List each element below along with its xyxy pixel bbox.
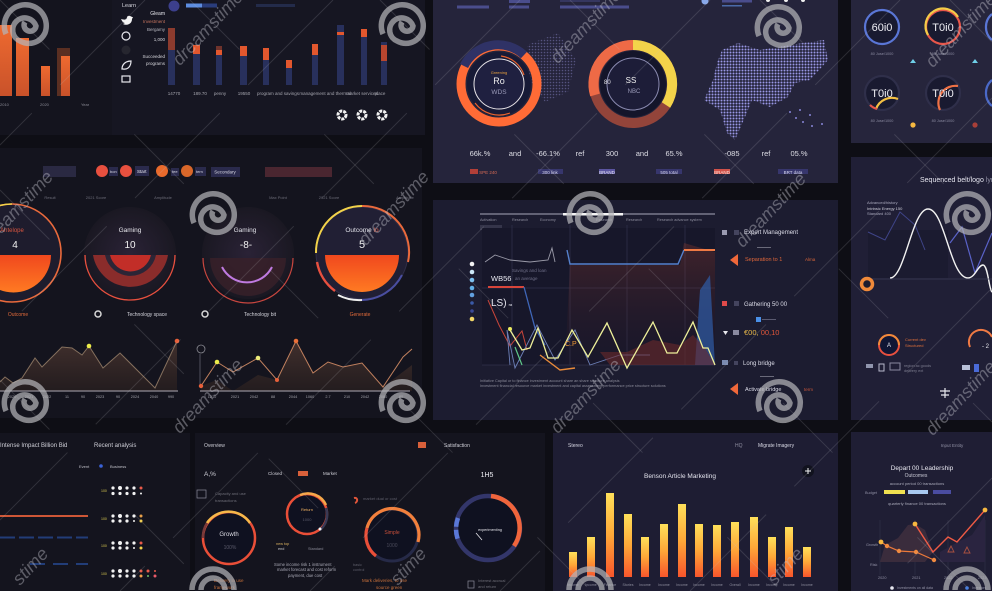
chart tabs <box>480 213 715 230</box>
header pills <box>43 165 332 177</box>
panel headings: Satisfaction <box>444 443 470 449</box>
bar axis labels: Income <box>693 583 705 587</box>
area chart right: 2042 <box>361 395 369 399</box>
chart footnote: Investment financial resource market investment and capital assessment performance price structure solutions <box>480 384 666 388</box>
panel: bottom middle rings <box>195 433 545 591</box>
line chart: 2021 <box>912 576 920 580</box>
bar axis labels: Income <box>567 583 579 587</box>
ring chart 1: transactions <box>215 498 237 503</box>
small icons row <box>866 363 979 373</box>
gauge captions: Generate <box>350 312 371 318</box>
bar axis labels: Income <box>748 583 760 587</box>
stats row <box>470 149 808 158</box>
donut chart right <box>593 45 672 123</box>
stacked bar chart: 14770 <box>168 91 181 96</box>
chart area: Savings and loan <box>512 268 547 273</box>
ring chart 4: Interest accrual <box>478 578 505 583</box>
area chart right: 88 <box>271 395 275 399</box>
orange bar chart: 2010 <box>0 102 10 107</box>
chart area <box>482 225 715 370</box>
small gauge captions: Result <box>44 195 57 200</box>
panel labels: Stereo <box>568 443 583 449</box>
social icon list <box>121 3 136 82</box>
stacked bar chart: penny <box>214 91 227 96</box>
watermark: dreamstime text: stime <box>386 544 430 589</box>
stacked chart legend: 1,000 <box>154 37 165 42</box>
area chart right: 2042 <box>250 395 258 399</box>
area chart right: 1210 <box>208 395 216 399</box>
panel heading: account period 00 transactions <box>890 481 944 486</box>
dot matrix: 100 <box>101 544 107 548</box>
panel headings: 1H5 <box>481 472 494 479</box>
small gauge captions: Max Point <box>269 195 288 200</box>
gauge 4: 5 <box>359 239 365 251</box>
curve legend: Advanced/history <box>867 200 898 205</box>
dot matrix: 100 <box>101 517 107 521</box>
gauge captions: Technology bit <box>244 312 277 318</box>
stats tags: SPE 240 <box>479 170 497 175</box>
panel labels <box>568 443 795 449</box>
chart tabs: Research <box>596 218 612 222</box>
gauge captions: 80 Juse/1000 <box>871 119 893 123</box>
orange bar chart <box>0 25 90 107</box>
donut chart left <box>461 45 537 122</box>
header pills: bon <box>110 169 117 174</box>
ring chart 1 <box>197 490 255 590</box>
social icon list: Learn <box>122 3 136 9</box>
area chart left <box>0 339 179 399</box>
ring chart 2: market forecast and cost reform <box>277 567 337 572</box>
mini gauge row: A <box>887 343 891 349</box>
chart title: Benson Article Marketing <box>644 473 716 480</box>
area chart right: 1060 <box>306 395 314 399</box>
area chart left: 2020 <box>8 395 16 399</box>
bell curve chart <box>862 209 992 292</box>
gauge 2 <box>84 207 176 300</box>
chart legend: Investors <box>972 586 986 590</box>
stacked bar chart: place <box>375 91 386 96</box>
titles <box>0 443 136 449</box>
gauge rings <box>865 9 992 110</box>
stacked chart legend <box>142 11 166 66</box>
panel headings: Overview <box>204 443 225 449</box>
header pills: Start <box>137 169 147 174</box>
donut chart right: NBC <box>628 89 641 95</box>
stats row: 300 <box>606 149 618 158</box>
area chart left: 11 <box>65 395 69 399</box>
stats row: and <box>636 149 648 158</box>
gauge 1: 4 <box>12 240 18 251</box>
gauge values: 60i0 <box>872 22 892 34</box>
header tabs <box>457 0 805 8</box>
gauge values: T0i0 <box>932 88 954 100</box>
bar axis labels: Income <box>676 583 688 587</box>
ring chart 1: framework <box>214 585 236 590</box>
side notes: Gathering 50 00 <box>744 302 788 308</box>
watermark: dreamstime text: stime <box>763 544 807 589</box>
side notes: €00, 00,10 <box>744 328 779 337</box>
area chart right <box>197 339 412 399</box>
gauge captions: 80 Juse/1000 <box>932 52 954 56</box>
header pills: tern <box>196 169 203 174</box>
panel: top right gauges <box>851 0 992 143</box>
panel: middle right curves <box>851 157 992 420</box>
stats row: ref <box>762 149 771 158</box>
mini gauge row: Current dev <box>905 337 926 342</box>
orange bar chart: Year <box>81 102 90 107</box>
bar axis labels: Overall <box>729 583 741 587</box>
stats tags: 505 total <box>660 170 678 175</box>
stats tags <box>470 169 808 175</box>
bar axis labels: Finance <box>604 583 616 587</box>
colour legend <box>865 490 951 495</box>
dotted world map <box>704 40 828 140</box>
gauge values: T0i0 <box>871 88 893 100</box>
small gauge captions: Amplitude <box>396 195 415 200</box>
plus button <box>802 465 814 477</box>
gauge captions: 80 Juse/1000 <box>932 119 954 123</box>
bar axis labels: Income <box>585 583 597 587</box>
ring chart 4: experimenting <box>478 528 502 532</box>
gauge 3 <box>202 207 294 303</box>
stacked chart legend: Investment <box>143 19 166 24</box>
panel: bottom left matrix <box>0 433 190 591</box>
gauge 4 <box>316 206 409 300</box>
panel: top center donuts and map <box>433 0 838 183</box>
area chart right: 2080 <box>379 395 387 399</box>
small gauge captions <box>44 195 415 200</box>
stats tags: BRT data <box>784 170 803 175</box>
stats row: -085 <box>724 149 740 158</box>
side notes: term <box>804 387 813 392</box>
stats tags: BRAND <box>599 170 616 175</box>
chart header <box>168 0 295 12</box>
ring chart 2: Some income risk 1 instrument <box>274 562 332 567</box>
ring chart 1: Delivery in use <box>214 578 244 583</box>
gauge 2: 10 <box>124 240 136 251</box>
donut chart left: Ro <box>493 76 505 86</box>
area chart left: 2022 <box>43 395 51 399</box>
ring chart 1: Growth <box>219 532 239 538</box>
ring chart 3: basic <box>353 563 362 567</box>
gauge 3: -8- <box>240 240 252 251</box>
vertical bar chart <box>569 493 811 577</box>
panel heading <box>888 443 964 506</box>
gauge values <box>871 22 954 100</box>
bar axis labels: Income <box>711 583 723 587</box>
mini gauge row <box>879 330 992 355</box>
small gauge captions: 2021 Score <box>86 195 107 200</box>
legend dots <box>470 262 474 321</box>
panel headings: Market <box>323 471 338 476</box>
ring chart 2: 1000 <box>303 517 312 522</box>
line chart: 2020 <box>878 576 886 580</box>
dot matrix: 100 <box>101 572 107 576</box>
status markers <box>910 59 978 128</box>
panel labels: Migrate Imagery <box>758 443 795 449</box>
area chart left: 990 <box>168 395 174 399</box>
ring chart 2 <box>274 493 337 578</box>
stacked bar chart: 19550 <box>238 91 251 96</box>
area chart right: 2021 <box>231 395 239 399</box>
chart area: C.P <box>565 341 577 348</box>
mini gauge row: - 2 <box>982 344 990 350</box>
line chart <box>866 508 987 580</box>
chart legend: Investments on all data <box>897 586 933 590</box>
gauge values: T0i0 <box>932 22 954 34</box>
ring chart 3: 1000 <box>386 543 398 549</box>
small gauge captions: 2021 Score <box>319 195 340 200</box>
area chart right: 2044 <box>289 395 297 399</box>
stats row: and <box>509 149 521 158</box>
ring chart 3: Mark deliveries, to use <box>362 578 408 583</box>
stacked chart legend: Bergamy <box>147 27 166 32</box>
panel heading: Outcomes <box>905 473 928 479</box>
area chart left: 90 <box>81 395 85 399</box>
gauge 3: Gaming <box>234 227 257 234</box>
line chart: Risk <box>870 563 877 567</box>
line chart: 2023 <box>978 576 986 580</box>
panel: bottom center bar chart <box>553 433 838 591</box>
orange bar chart: 2020 <box>40 102 50 107</box>
stats tags: 300 link <box>542 170 559 175</box>
stacked bar chart <box>168 25 387 96</box>
dot mesh <box>527 33 576 102</box>
ring chart 3 <box>353 496 419 590</box>
side notes: Separation to 1 <box>745 257 782 263</box>
orange trend line <box>0 516 88 564</box>
chart footnote: Initiative Capital or to finance investment account share an share structure analysis <box>480 379 620 383</box>
ring chart 2: Return <box>301 507 313 512</box>
chart area: an average <box>515 276 538 281</box>
panel: middle center line chart <box>433 200 838 420</box>
stats tags: BRAND <box>714 170 731 175</box>
watermark: dreamstime text: stime <box>8 544 52 589</box>
legend <box>79 464 126 469</box>
panel heading: Depart 00 Leadership <box>891 465 954 472</box>
bar axis labels: Income <box>639 583 651 587</box>
icon: cross marker <box>940 388 950 398</box>
panel heading: quarterly finance 00 transactions <box>888 501 946 506</box>
gauge captions: Technology space <box>127 312 167 318</box>
ring chart 2: Standard <box>308 547 323 551</box>
donut chart right: 80 <box>604 80 611 86</box>
ring chart 2: payment, due cost <box>288 573 323 578</box>
bar axis labels: Stories <box>623 583 634 587</box>
header pills: fee <box>172 169 178 174</box>
watermark: dreamstime text: dreamstime <box>546 355 625 437</box>
ring chart 3: source green <box>376 585 403 590</box>
chart tabs: Activation <box>480 218 496 222</box>
donut chart right: SS <box>626 76 636 85</box>
bar axis labels: Income <box>766 583 778 587</box>
stats row: 05.% <box>790 149 808 158</box>
stacked chart legend: programs <box>146 61 166 66</box>
area chart right: 80 <box>399 395 403 399</box>
ring chart 3: Simple <box>384 530 400 536</box>
header pills: Secondary <box>214 170 237 174</box>
ring chart 3: control <box>353 568 365 572</box>
icon: three gears <box>338 111 386 119</box>
watermark: dreamstime text: dreamstime <box>354 167 433 249</box>
stats row: 65.% <box>665 149 683 158</box>
dot matrix: 100 <box>101 489 107 493</box>
stats row: ref <box>576 149 585 158</box>
donut chart left: Greening <box>491 70 507 75</box>
gauge captions <box>871 52 954 123</box>
chart tabs: Research <box>626 218 642 222</box>
panel: middle left gauges <box>0 148 422 418</box>
bar axis labels: Income <box>783 583 795 587</box>
bar axis labels: Income <box>801 583 813 587</box>
panel: bottom right line chart <box>851 432 992 591</box>
legend: Business <box>110 464 126 469</box>
legend: Event <box>79 464 90 469</box>
stats row: -66.1% <box>536 149 560 158</box>
dot matrix <box>101 486 156 578</box>
curve legend: Standard 400 <box>867 211 892 216</box>
stacked bar chart: market services <box>346 91 378 96</box>
side notes: Long bridge <box>743 361 775 367</box>
chart area: WB56 <box>491 274 511 283</box>
panel: top stacked bars <box>112 0 425 135</box>
ring chart 3: market dual or cost <box>363 496 398 501</box>
ring chart 2: end <box>278 547 284 551</box>
stacked chart legend: Gleam <box>150 11 165 17</box>
panel headings <box>204 442 494 479</box>
gauge 1 <box>0 204 61 302</box>
area chart left: 2040 <box>150 395 158 399</box>
line chart: 2022 <box>944 576 952 580</box>
area chart left: 90 <box>116 395 120 399</box>
side notes: Alma <box>805 257 816 262</box>
chart tabs: Economy <box>540 218 556 222</box>
curve legend <box>867 200 903 216</box>
side notes: Activate bridge <box>745 387 781 393</box>
panel headings: A,% <box>204 471 216 478</box>
stats row: 66k.% <box>470 149 491 158</box>
chart legend <box>890 586 986 590</box>
area chart left: 2021 <box>25 395 33 399</box>
stacked chart legend: Succeeded <box>142 54 165 59</box>
small icons row: delivery ext <box>904 369 924 373</box>
ring chart 1: Capacity and use <box>215 491 247 496</box>
ring chart 2: new top <box>276 542 289 546</box>
ring chart 4 <box>456 496 520 589</box>
curve legend: Intrinsic Energy 150 <box>867 206 903 211</box>
stacked bar chart: program and savings <box>257 91 300 96</box>
gauge 2: Gaming <box>119 227 142 234</box>
ring chart 4: and return <box>478 584 496 589</box>
chart area: LS) ra <box>491 298 513 309</box>
donut chart left: WDS <box>491 89 507 96</box>
mini gauge row: Structured <box>905 343 923 348</box>
titles: Recent analysis <box>94 443 136 449</box>
panel: top left bars <box>0 0 112 135</box>
chart tabs: Research advance system <box>657 218 702 222</box>
chart tabs: Research <box>512 218 528 222</box>
stacked bar chart: 189.70 <box>193 91 207 96</box>
bar axis labels <box>567 583 813 587</box>
area chart left: 2023 <box>96 395 104 399</box>
gauge captions: Outcome <box>8 312 28 318</box>
area chart left: 2024 <box>131 395 139 399</box>
chart footnote <box>480 379 666 388</box>
titles: Intense Impact Billion Bid <box>0 443 67 449</box>
stacked bar chart: management and thermal <box>299 91 351 96</box>
watermark: dreamstime text: dreamstime <box>731 169 810 251</box>
line chart: Growth <box>866 543 878 547</box>
gauge captions: 80 Juse/1000 <box>871 52 893 56</box>
bar axis labels: Income <box>658 583 670 587</box>
colour legend: Budget <box>865 491 878 495</box>
panel heading: Input Entity <box>941 443 964 448</box>
small icons row: region ac goods <box>904 364 931 368</box>
watermark: dreamstime text: dreamstime <box>168 355 247 437</box>
ring chart 1: 100% <box>224 545 237 551</box>
side notes: Expert Management <box>744 230 798 236</box>
small gauge captions: Amplitude <box>154 195 173 200</box>
gauge 1: Antelope <box>0 228 25 234</box>
panel headings: Closed <box>268 471 283 476</box>
area chart right: 210 <box>344 395 350 399</box>
panel labels: HQ <box>735 443 743 449</box>
gauge 4: Outcome lo <box>345 227 379 234</box>
area chart right: 2.7 <box>325 395 331 399</box>
side notes <box>722 230 816 395</box>
gauge captions <box>8 311 371 318</box>
